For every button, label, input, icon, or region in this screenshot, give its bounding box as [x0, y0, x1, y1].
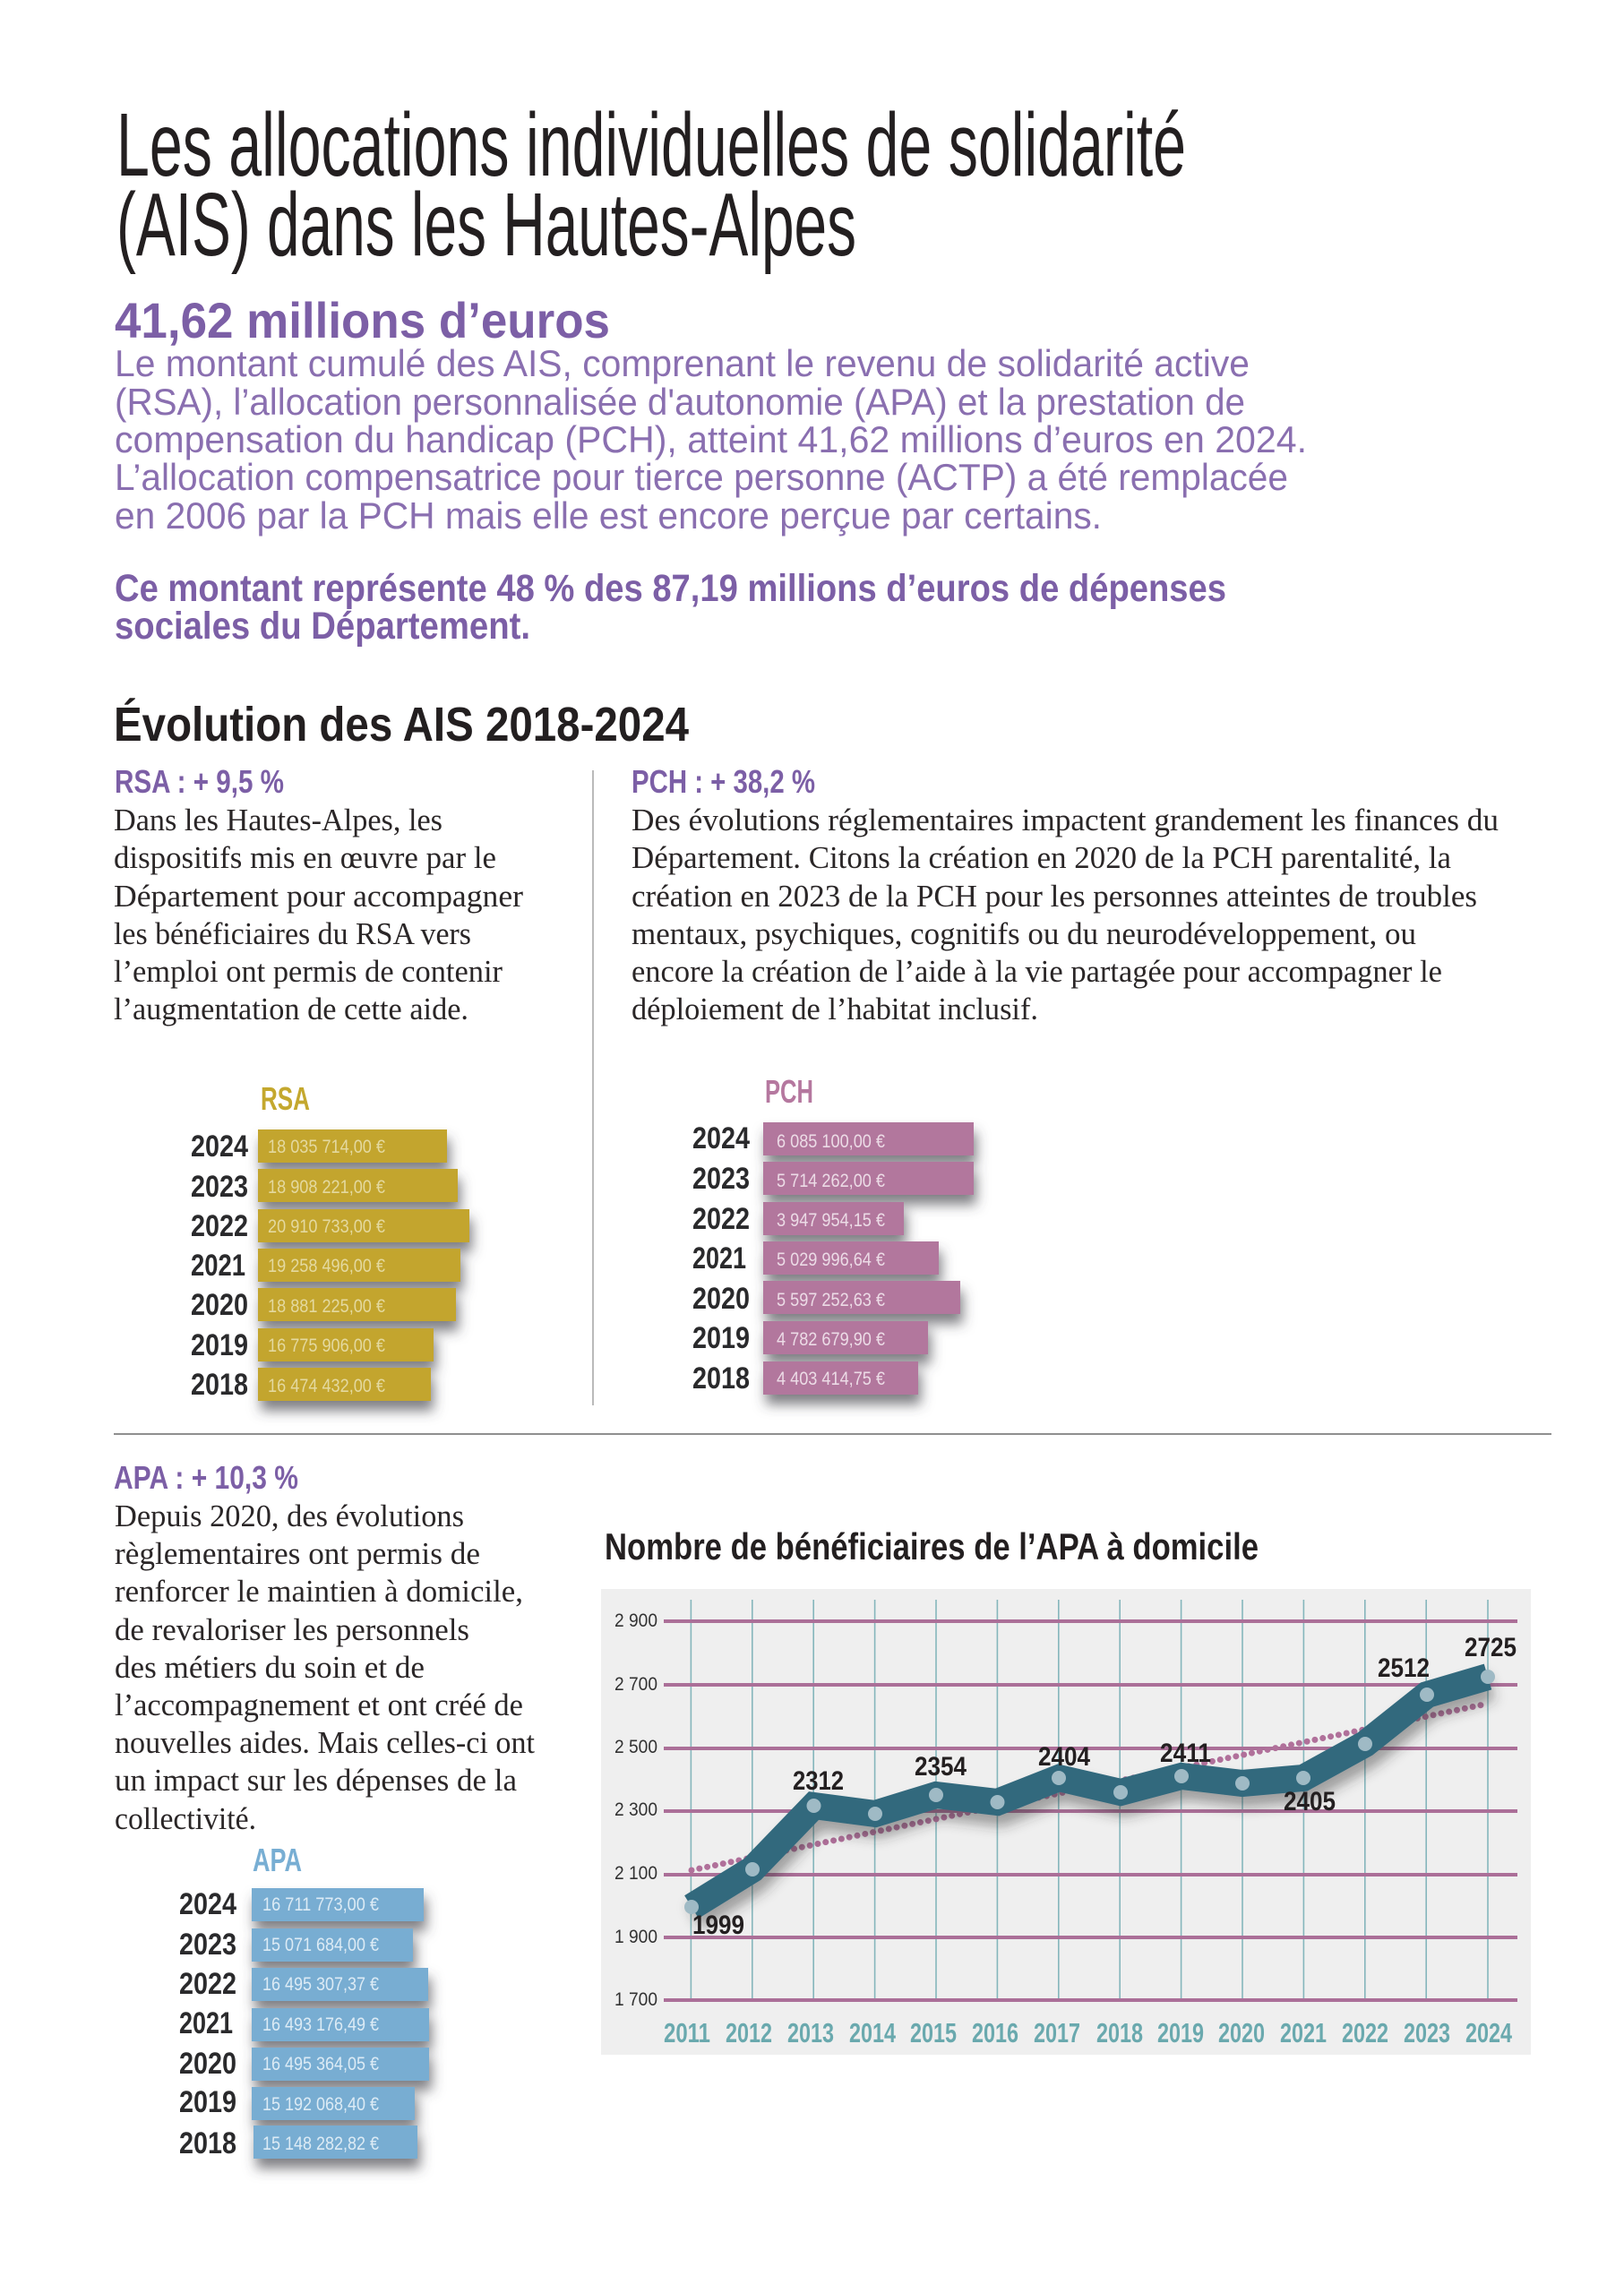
- APA bar chart: APA: [253, 1842, 302, 1878]
- x axis labels: 2020: [1218, 2017, 1265, 2048]
- data labels: 2512: [1378, 1653, 1430, 1683]
- PCH bar chart: 4 782 679,90 €: [777, 1329, 885, 1350]
- APA bar chart: 2021: [179, 2006, 233, 2040]
- APA bar chart: 2020: [179, 2047, 236, 2081]
- y axis labels: [614, 1610, 657, 2010]
- PCH text block: déploiement de l’habitat inclusif.: [632, 992, 1038, 1026]
- intro paragraph: (RSA), l’allocation personnalisée d'autonomie (APA) et la prestation de: [115, 381, 1245, 423]
- section heading: Évolution des AIS 2018-2024: [114, 698, 689, 751]
- x axis labels: 2014: [849, 2017, 897, 2048]
- APA text block: collectivité.: [115, 1801, 256, 1836]
- y axis labels: 2 700: [614, 1674, 657, 1695]
- intro paragraph: [115, 342, 1307, 537]
- APA bar chart: 16 495 307,37 €: [262, 1974, 379, 1995]
- RSA text block: l’augmentation de cette aide.: [114, 992, 468, 1026]
- y axis labels: 2 500: [614, 1737, 657, 1757]
- RSA bar chart: 2022: [191, 1209, 248, 1243]
- RSA bar chart: 16 775 906,00 €: [268, 1335, 385, 1356]
- APA text block: [114, 1459, 535, 1836]
- RSA bar chart: 2019: [191, 1328, 248, 1362]
- PCH bar chart: 2018: [692, 1361, 750, 1396]
- x axis labels: 2013: [787, 2017, 834, 2048]
- APA bar chart: 15 148 282,82 €: [262, 2134, 379, 2154]
- RSA bar chart: 18 881 225,00 €: [268, 1296, 385, 1317]
- APA text block: l’accompagnement et ont créé de: [115, 1688, 523, 1722]
- PCH bar chart: 5 597 252,63 €: [777, 1290, 885, 1310]
- data labels: [692, 1633, 1517, 1940]
- APA bar chart: 15 192 068,40 €: [262, 2094, 379, 2115]
- highlighted statement: [115, 567, 1226, 648]
- RSA text block: dispositifs mis en œuvre par le: [114, 840, 496, 875]
- line chart: APA beneficiaries: [601, 1589, 1531, 2055]
- data labels: 2411: [1160, 1739, 1211, 1768]
- chart title: Nombre de bénéficiaires de l’APA à domicile: [605, 1525, 1259, 1567]
- x axis labels: 2022: [1342, 2017, 1388, 2048]
- data labels: 2725: [1465, 1633, 1517, 1662]
- RSA bar chart: 16 474 432,00 €: [268, 1376, 385, 1396]
- APA bar chart: 2019: [179, 2085, 236, 2119]
- key figure heading: 41,62 millions d’euros: [115, 292, 610, 348]
- title: [116, 95, 1186, 275]
- PCH text block: encore la création de l’aide à la vie partagée pour accompagner le: [632, 954, 1442, 989]
- PCH bar chart: 3 947 954,15 €: [777, 1210, 885, 1231]
- PCH text block: Département. Citons la création en 2020 de la PCH parentalité, la: [632, 840, 1451, 875]
- PCH bar chart: PCH: [765, 1073, 813, 1110]
- RSA text block: [114, 763, 523, 1026]
- highlighted statement: Ce montant représente 48 % des 87,19 millions d’euros de dépenses: [115, 567, 1226, 610]
- RSA text block: RSA : + 9,5 %: [115, 763, 284, 800]
- data labels: 2404: [1038, 1742, 1090, 1772]
- APA bar chart: 2018: [179, 2126, 236, 2160]
- trend line: [692, 1704, 1488, 1870]
- APA text block: renforcer le maintien à domicile,: [115, 1574, 523, 1609]
- APA bar chart: 2024: [179, 1887, 236, 1921]
- PCH bar chart: 6 085 100,00 €: [777, 1131, 885, 1152]
- RSA bar chart: 2020: [191, 1288, 248, 1322]
- RSA bar chart: [191, 1080, 469, 1402]
- RSA text block: Dans les Hautes-Alpes, les: [114, 803, 443, 837]
- PCH bar chart: 2019: [692, 1321, 750, 1355]
- APA bar chart: [179, 1842, 429, 2160]
- PCH bar chart: 5 714 262,00 €: [777, 1171, 885, 1191]
- RSA text block: Département pour accompagner: [114, 879, 523, 914]
- x axis labels: 2021: [1280, 2017, 1327, 2048]
- intro paragraph: en 2006 par la PCH mais elle est encore perçue par certains.: [115, 494, 1102, 537]
- APA text block: de revaloriser les personnels: [115, 1612, 469, 1647]
- PCH bar chart: [692, 1073, 974, 1396]
- PCH text block: mentaux, psychiques, cognitifs ou du neurodéveloppement, ou: [632, 916, 1416, 951]
- APA text block: APA : + 10,3 %: [114, 1459, 298, 1496]
- PCH bar chart: 2024: [692, 1121, 750, 1155]
- x axis labels: 2015: [910, 2017, 957, 2048]
- APA text block: règlementaires ont permis de: [115, 1536, 480, 1571]
- RSA bar chart: 19 258 496,00 €: [268, 1256, 385, 1276]
- APA text block: un impact sur les dépenses de la: [115, 1763, 517, 1798]
- x axis labels: 2024: [1465, 2017, 1513, 2048]
- APA bar chart: 2023: [179, 1928, 236, 1962]
- APA bar chart: 15 071 684,00 €: [262, 1935, 379, 1955]
- data labels: 2312: [793, 1766, 844, 1796]
- PCH bar chart: 2020: [692, 1282, 750, 1316]
- y axis labels: 1 700: [614, 1989, 657, 2010]
- RSA bar chart: 18 035 714,00 €: [268, 1137, 385, 1157]
- x axis labels: 2012: [726, 2017, 772, 2048]
- RSA bar chart: 20 910 733,00 €: [268, 1216, 385, 1237]
- y axis labels: 2 900: [614, 1610, 657, 1631]
- APA bar chart: 2022: [179, 1967, 236, 2001]
- data labels: 2354: [915, 1752, 967, 1782]
- intro paragraph: Le montant cumulé des AIS, comprenant le revenu de solidarité active: [115, 342, 1250, 384]
- data labels: 1999: [692, 1911, 744, 1940]
- x axis labels: 2023: [1404, 2017, 1450, 2048]
- x axis labels: 2016: [972, 2017, 1018, 2048]
- x axis labels: 2017: [1034, 2017, 1080, 2048]
- data labels: 2405: [1284, 1787, 1336, 1816]
- chart background: [601, 1589, 1531, 2055]
- RSA bar chart: 18 908 221,00 €: [268, 1177, 385, 1198]
- RSA bar chart: RSA: [261, 1080, 310, 1117]
- RSA bar chart: 2018: [191, 1368, 248, 1402]
- PCH bar chart: 5 029 996,64 €: [777, 1250, 885, 1270]
- RSA text block: les bénéficiaires du RSA vers: [114, 916, 471, 951]
- RSA bar chart: 2021: [191, 1249, 245, 1283]
- APA bar chart: 16 493 176,49 €: [262, 2014, 379, 2035]
- APA text block: nouvelles aides. Mais celles-ci ont: [115, 1725, 535, 1760]
- data points: [684, 1670, 1495, 1914]
- APA text block: des métiers du soin et de: [115, 1650, 425, 1685]
- intro paragraph: L’allocation compensatrice pour tierce personne (ACTP) a été remplacée: [115, 456, 1288, 498]
- APA bar chart: 16 711 773,00 €: [262, 1894, 379, 1915]
- y axis labels: 2 300: [614, 1799, 657, 1820]
- PCH bar chart: 2021: [692, 1241, 746, 1275]
- RSA text block: l’emploi ont permis de contenir: [114, 954, 503, 989]
- PCH bar chart: 4 403 414,75 €: [777, 1369, 885, 1389]
- PCH text block: PCH : + 38,2 %: [632, 763, 815, 800]
- PCH text block: [632, 763, 1499, 1026]
- APA text block: Depuis 2020, des évolutions: [115, 1499, 464, 1533]
- y axis labels: 1 900: [614, 1927, 657, 1947]
- title: (AIS) dans les Hautes-Alpes: [116, 175, 856, 275]
- PCH bar chart: 2023: [692, 1162, 750, 1196]
- RSA bar chart: 2024: [191, 1129, 248, 1164]
- data line: [692, 1677, 1488, 1907]
- highlighted statement: sociales du Département.: [115, 605, 530, 648]
- APA bar chart: 16 495 364,05 €: [262, 2054, 379, 2074]
- PCH bar chart: 2022: [692, 1202, 750, 1236]
- RSA bar chart: 2023: [191, 1170, 248, 1204]
- x axis labels: 2019: [1157, 2017, 1204, 2048]
- x axis labels: [664, 2017, 1513, 2048]
- y axis labels: 2 100: [614, 1863, 657, 1884]
- intro paragraph: compensation du handicap (PCH), atteint 41,62 millions d’euros en 2024.: [115, 418, 1307, 460]
- x axis labels: 2018: [1096, 2017, 1143, 2048]
- PCH text block: création en 2023 de la PCH pour les personnes atteintes de troubles: [632, 879, 1477, 914]
- x axis labels: 2011: [664, 2017, 710, 2048]
- PCH text block: Des évolutions réglementaires impactent grandement les finances du: [632, 803, 1499, 837]
